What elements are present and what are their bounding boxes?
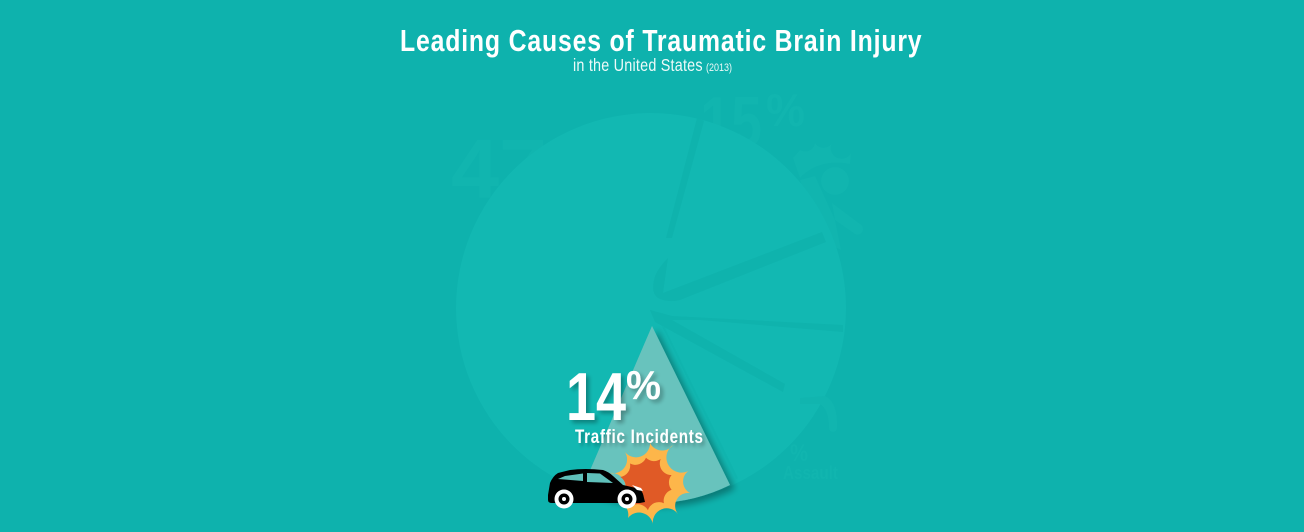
faded label: assault (783, 396, 838, 483)
icon: crash burst (610, 443, 690, 525)
faded icon: person struck (793, 143, 863, 250)
faded label: 15%: % (766, 84, 805, 136)
faded label: assault: % (790, 440, 808, 467)
segment edge beside highlighted wedge (662, 326, 738, 479)
faded label: 15%: 15 (700, 83, 762, 163)
title: Leading Causes of Traumatic Brain Injury (400, 23, 922, 58)
faded pie chart (456, 113, 846, 503)
highlighted segment: traffic incidents (582, 326, 730, 503)
icon: car (548, 469, 645, 508)
label: traffic incidents: Traffic Incidents (575, 425, 703, 447)
gap between pie segments (650, 118, 843, 392)
subtitle: (2013) (706, 62, 732, 74)
faded label: 47% falls: 47 (451, 122, 547, 216)
subtitle: in the United States (573, 56, 703, 75)
label: 14 percent: 14 (566, 359, 626, 435)
faded label: assault: Assault (783, 463, 838, 483)
label: 14 percent: % (626, 362, 661, 408)
